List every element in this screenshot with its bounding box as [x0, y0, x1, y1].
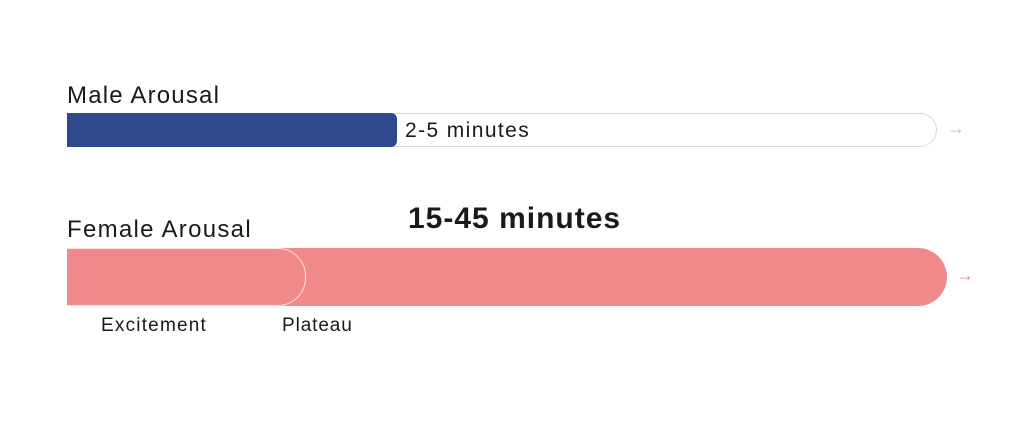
arrow: male: →	[947, 118, 965, 138]
heading: male arousal: Male Arousal	[67, 82, 220, 109]
label: plateau: Plateau	[282, 315, 353, 336]
arrow: female: →	[956, 265, 974, 285]
bar: female arousal	[67, 248, 947, 306]
bar track	[67, 113, 937, 147]
label: excitement: Excitement	[101, 315, 207, 336]
label: 2-5 minutes: 2-5 minutes	[405, 119, 530, 142]
heading: female arousal: Female Arousal	[67, 216, 252, 243]
label: 15-45 minutes: 15-45 minutes	[408, 202, 621, 235]
excitement segment	[67, 248, 306, 306]
bar fill	[67, 113, 397, 147]
bar: male arousal	[67, 113, 937, 147]
